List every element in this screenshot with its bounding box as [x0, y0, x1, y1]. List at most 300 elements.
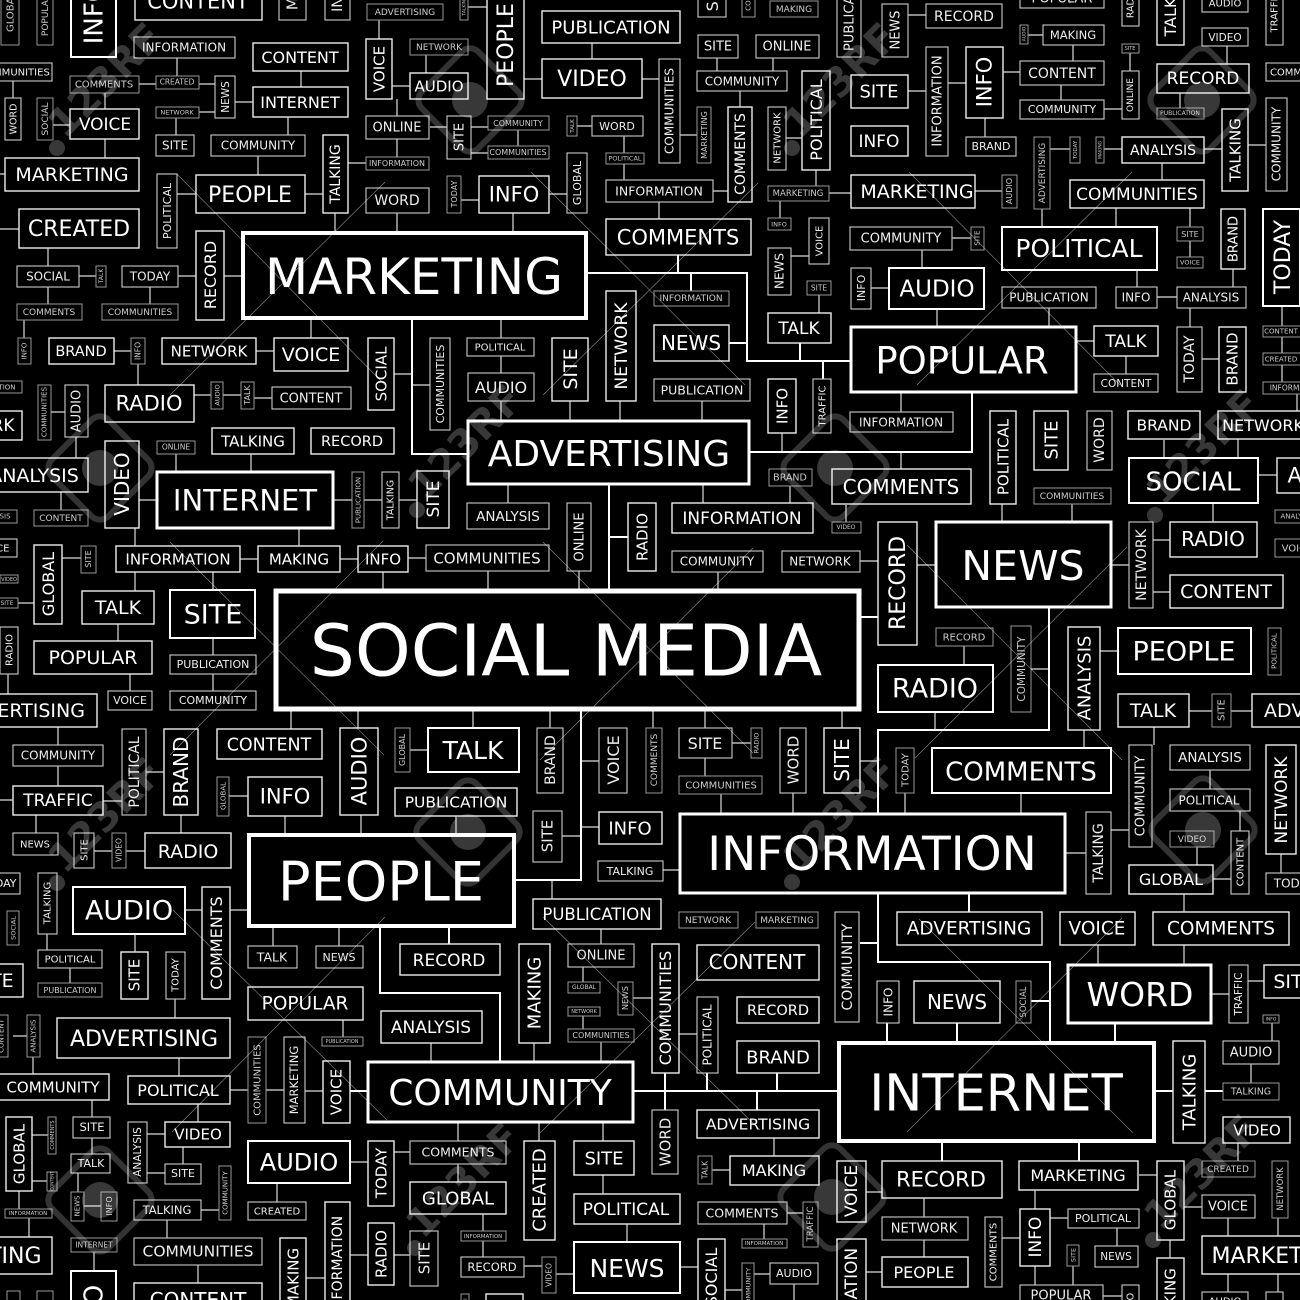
NEWS — [936, 522, 1111, 607]
VOICE: VOICE — [79, 115, 131, 135]
NETWORK: NETWORK — [416, 43, 463, 53]
TALKING: TALKING — [1230, 1086, 1271, 1097]
COMMENTS — [48, 1117, 56, 1154]
CONTENT: CONTENT — [1180, 581, 1272, 603]
INFO — [71, 1271, 116, 1300]
ANALYSIS: ANALYSIS — [1130, 143, 1196, 159]
AUDIO — [340, 728, 378, 815]
CREATED — [1202, 1161, 1255, 1177]
COMMUNITIES — [568, 1029, 634, 1042]
PUBLICATION: PUBLICATION — [661, 382, 743, 398]
INFORMATION: INFORMATION — [464, 1234, 502, 1240]
SITE — [533, 811, 562, 862]
PEOPLE: PEOPLE — [278, 850, 484, 913]
CREATED: CREATED — [1207, 1165, 1249, 1175]
PUBLICATION: PUBLICATION — [325, 1039, 359, 1045]
COMMENTS — [606, 219, 751, 255]
VIDEO — [112, 833, 126, 868]
TODAY — [0, 873, 20, 894]
SITE: SITE — [80, 1120, 104, 1134]
SOCIAL: SOCIAL — [9, 916, 17, 940]
POLITICAL — [1268, 628, 1281, 675]
MAKING — [280, 1238, 306, 1300]
PUBLICATION: PUBLICATION — [355, 477, 363, 523]
ANALYSIS: ANALYSIS — [1178, 750, 1242, 766]
ADVERTISING — [1034, 137, 1050, 209]
INFORMATION — [366, 157, 429, 170]
WORD: WORD — [656, 1118, 674, 1166]
TRAFFIC — [1266, 1292, 1283, 1300]
COMMENTS — [70, 76, 139, 93]
CONTENT — [272, 387, 351, 409]
ANALYSIS — [128, 1122, 147, 1183]
ANALYSIS — [1177, 287, 1246, 308]
INFORMATION — [926, 47, 948, 156]
INFORMATION: INFORMATION — [125, 550, 231, 568]
NEWS: NEWS — [220, 81, 232, 113]
AUDIO — [1202, 1292, 1248, 1300]
SITE — [851, 75, 908, 108]
TALKING — [382, 472, 399, 528]
INFORMATION — [325, 1202, 350, 1300]
COMMENTS: COMMENTS — [945, 757, 1097, 787]
VIDEO — [832, 522, 861, 533]
RECORD — [737, 997, 819, 1023]
SITE: SITE — [560, 348, 582, 390]
VOICE — [108, 691, 152, 710]
NETWORK — [1129, 522, 1153, 608]
MAKING — [730, 1156, 819, 1185]
SITE — [679, 728, 732, 758]
COMMENTS: COMMENTS — [1167, 919, 1275, 940]
CREATED — [248, 1202, 306, 1220]
ANALYSIS: ANALYSIS — [132, 1127, 144, 1177]
TALK: TALK — [777, 319, 821, 339]
RADIO: RADIO — [158, 841, 218, 863]
NEWS: NEWS — [1100, 1251, 1132, 1263]
MARKETING — [851, 175, 975, 208]
NETWORK — [162, 338, 256, 364]
COMMENTS: COMMENTS — [989, 1223, 1000, 1281]
RADIO — [1122, 0, 1139, 26]
POLITICAL — [157, 174, 177, 248]
POLITICAL — [574, 1194, 680, 1224]
SOCIAL: SOCIAL — [1019, 986, 1029, 1018]
SITE: SITE — [0, 600, 14, 607]
CREATED: CREATED — [160, 78, 195, 87]
ONLINE: ONLINE — [763, 40, 811, 55]
MARKETING — [0, 1237, 52, 1274]
COMMUNITY — [170, 691, 256, 710]
NETWORK — [882, 1217, 968, 1240]
NEWS — [215, 76, 235, 118]
VOICE: VOICE — [604, 735, 623, 785]
VOICE — [0, 539, 17, 557]
GLOBAL — [34, 545, 62, 624]
MARKETING: MARKETING — [1030, 1166, 1126, 1185]
TALK: TALK — [98, 268, 105, 284]
POLITICAL — [1002, 227, 1157, 270]
SITE — [1264, 965, 1300, 998]
GLOBAL — [1129, 865, 1213, 894]
ANALYSIS — [1170, 745, 1250, 770]
INTERNET — [253, 87, 348, 117]
CREATED: CREATED — [529, 1148, 550, 1232]
TODAY — [1177, 327, 1202, 392]
SOCIAL — [1129, 458, 1258, 503]
COMMUNITIES — [1034, 488, 1111, 504]
TALKING — [1222, 109, 1248, 191]
PUBLICATION: PUBLICATION — [405, 794, 507, 812]
MARKETING: MARKETING — [265, 248, 563, 306]
ADVERTISING — [57, 1018, 230, 1058]
NEWS — [914, 981, 1000, 1023]
POLITICAL — [990, 411, 1016, 504]
INFORMATION: INFORMATION — [659, 294, 723, 304]
NETWORK — [768, 107, 786, 170]
MAKING — [258, 546, 340, 572]
TALK: TALK — [94, 597, 142, 619]
VIDEO: VIDEO — [1, 577, 17, 583]
ANALYSIS: ANALYSIS — [476, 509, 540, 525]
GLOBAL — [1157, 1161, 1184, 1240]
VIDEO: VIDEO — [174, 1125, 222, 1143]
TALK — [1157, 0, 1184, 45]
BRAND — [1221, 209, 1245, 269]
CREATED: CREATED — [1265, 356, 1297, 364]
GLOBAL: GLOBAL — [1139, 870, 1203, 889]
PUBLICATION — [170, 655, 256, 674]
BRAND: BRAND — [543, 735, 559, 785]
TODAY: TODAY — [372, 1147, 390, 1199]
INFO — [248, 777, 322, 816]
SITE — [121, 952, 148, 999]
VOICE: VOICE — [370, 46, 388, 92]
TODAY: TODAY — [1182, 335, 1198, 384]
INFORMATION: INFORMATION — [931, 55, 946, 147]
POPULAR — [37, 1291, 53, 1300]
ANALYSIS — [1068, 627, 1100, 730]
RADIO — [145, 833, 231, 868]
NEWS — [71, 1192, 84, 1221]
PUBLICATION: PUBLICATION — [177, 658, 249, 671]
POLITICAL: POLITICAL — [1075, 1212, 1132, 1225]
WORD: WORD — [8, 104, 19, 134]
VIDEO — [1170, 831, 1214, 847]
VOICE — [809, 218, 829, 264]
POLITICAL: POLITICAL — [807, 79, 826, 161]
INFO — [851, 268, 871, 309]
COMMUNITY: COMMUNITY — [179, 694, 247, 707]
BRAND: BRAND — [1137, 417, 1192, 435]
PEOPLE: PEOPLE — [494, 3, 519, 87]
SITE — [1212, 694, 1231, 727]
ADVERTISING: ADVERTISING — [706, 1116, 810, 1134]
TALKING — [598, 861, 663, 881]
MAKING: MAKING — [742, 1161, 806, 1180]
SOCIAL — [1016, 981, 1031, 1023]
TALKING: TALKING — [1179, 1054, 1200, 1131]
SITE — [170, 590, 255, 638]
COMMUNITIES — [426, 545, 549, 571]
AUDIO: AUDIO — [348, 737, 372, 805]
SITE: SITE — [974, 230, 982, 246]
NEWS: NEWS — [961, 542, 1085, 590]
RECORD — [400, 944, 500, 975]
SITE: SITE — [415, 1242, 433, 1274]
RECORD — [882, 1161, 1002, 1198]
WORD — [1068, 965, 1211, 1023]
GLOBAL: GLOBAL — [572, 984, 597, 991]
SOCIAL — [698, 1239, 725, 1300]
COMMENTS — [410, 1141, 506, 1164]
COMMUNITY — [672, 551, 763, 572]
VIDEO — [542, 59, 642, 98]
COMMUNITIES: COMMUNITIES — [662, 68, 676, 154]
COMMUNITY: COMMUNITY — [221, 138, 296, 152]
watermark logos, small with 123RF: 123RF — [399, 376, 532, 509]
INFORMATION: INFORMATION — [859, 415, 943, 429]
COMMENTS: COMMENTS — [617, 226, 739, 250]
INTERNET: INTERNET — [75, 1241, 113, 1250]
RECORD: RECORD — [467, 1260, 517, 1274]
AUDIO: AUDIO — [414, 77, 464, 95]
COMMUNITY — [742, 1263, 754, 1300]
COMMUNITIES: COMMUNITIES — [253, 1044, 264, 1116]
MAKING: MAKING — [269, 550, 329, 568]
RADIO: RADIO — [372, 1230, 390, 1278]
NETWORK: NETWORK — [571, 1009, 598, 1015]
VOICE — [366, 39, 392, 99]
ANALYSIS — [1275, 510, 1300, 523]
POLITICAL: POLITICAL — [1015, 234, 1143, 263]
CONTENT — [1231, 831, 1249, 894]
ANALYSIS: ANALYSIS — [1183, 290, 1239, 304]
CONTENT: CONTENT — [1264, 328, 1299, 336]
COMMUNITY: COMMUNITY — [6, 1078, 100, 1096]
INFORMATION — [680, 814, 1065, 893]
RECORD: RECORD — [321, 434, 383, 450]
AUDIO — [770, 1263, 818, 1284]
ONLINE — [1122, 71, 1139, 119]
TALK: TALK — [77, 1157, 105, 1170]
POPULAR: POPULAR — [262, 994, 348, 1015]
NEWS — [574, 1242, 680, 1293]
ADVERTISING: ADVERTISING — [488, 434, 730, 475]
ANALYSIS — [1277, 458, 1300, 493]
COMMUNITY: COMMUNITY — [1134, 756, 1149, 836]
GLOBAL — [7, 1291, 20, 1300]
INFO — [131, 338, 145, 364]
SITE: SITE — [704, 40, 732, 55]
thick connectors — [350, 255, 1223, 1161]
TALKING — [461, 1294, 469, 1300]
MARKETING — [768, 186, 829, 201]
INFO — [1263, 1015, 1279, 1023]
VIDEO — [165, 1122, 230, 1147]
COMMENTS: COMMENTS — [75, 80, 133, 91]
GLOBAL: GLOBAL — [398, 733, 407, 766]
NETWORK: NETWORK — [1134, 528, 1150, 601]
RADIO — [1170, 522, 1257, 557]
PUBLICATION: PUBLICATION — [551, 17, 671, 38]
SITE: SITE — [811, 284, 827, 293]
INFO: INFO — [1026, 1217, 1046, 1257]
SITE — [417, 471, 449, 528]
INFO — [1116, 287, 1157, 308]
GLOBAL: GLOBAL — [220, 782, 228, 810]
INFO: INFO — [105, 1196, 114, 1216]
WORD — [1087, 411, 1112, 470]
TRAFFIC — [1229, 965, 1248, 1023]
SITE: SITE — [171, 1167, 195, 1180]
WORD: WORD — [1087, 975, 1193, 1014]
COMMUNITY: COMMUNITY — [1028, 103, 1096, 116]
ADVERTISING: ADVERTISING — [375, 8, 435, 18]
RADIO: RADIO — [752, 733, 760, 753]
POLITICAL — [606, 153, 644, 164]
POPULAR — [248, 987, 363, 1020]
COMMUNITIES — [488, 146, 549, 159]
SITE: SITE — [584, 1148, 624, 1169]
COMMUNITY — [219, 1166, 231, 1220]
AUDIO: AUDIO — [260, 1149, 338, 1177]
SITE — [1067, 1245, 1079, 1266]
INFORMATION: INFORMATION — [9, 1211, 47, 1217]
VIDEO: VIDEO — [115, 838, 124, 862]
INFO — [1020, 1209, 1050, 1266]
CREATED — [156, 76, 199, 89]
COMMUNITY — [742, 0, 755, 17]
CREATED: CREATED — [254, 1207, 301, 1218]
AUDIO: AUDIO — [776, 1267, 812, 1280]
BRAND — [1219, 327, 1246, 392]
INTERNET: INTERNET — [173, 483, 317, 517]
INTERNET — [157, 472, 333, 528]
VOICE — [837, 1161, 866, 1222]
BRAND — [769, 469, 812, 486]
POLITICAL: POLITICAL — [475, 343, 526, 354]
MAKING — [519, 944, 550, 1043]
TODAY — [1266, 873, 1300, 894]
WORD — [366, 188, 429, 213]
INFO — [101, 1192, 117, 1221]
ONLINE — [366, 116, 429, 139]
SITE: SITE — [125, 959, 143, 991]
TODAY — [122, 266, 178, 287]
PUBLICATION — [38, 983, 102, 997]
RADIO — [1122, 1285, 1139, 1300]
POLITICAL — [697, 997, 718, 1073]
PUBLICATION — [837, 1239, 866, 1300]
RECORD — [926, 4, 1002, 28]
VOICE: VOICE — [1069, 919, 1125, 940]
NEWS — [654, 325, 729, 361]
RADIO: RADIO — [5, 634, 16, 666]
COMMUNITY: COMMUNITY — [861, 232, 941, 247]
CONTENT: CONTENT — [261, 48, 339, 67]
INFORMATION — [0, 381, 22, 393]
watermark logos, small with 123RF: 123RF — [774, 748, 907, 881]
TALK — [82, 591, 154, 624]
COMMUNITIES: COMMUNITIES — [685, 781, 757, 792]
INTERNET — [839, 1043, 1154, 1141]
MAKING — [770, 1, 818, 17]
VOICE — [323, 1061, 350, 1123]
COMMUNITIES — [1070, 180, 1204, 208]
SITE — [574, 1141, 634, 1175]
watermark logos, small with 123RF: 123RF — [1137, 381, 1270, 514]
RECORD: RECORD — [934, 9, 994, 25]
TRAFFIC — [803, 1202, 818, 1247]
COMMUNITY — [1011, 626, 1031, 712]
INFORMATION: INFORMATION — [142, 40, 226, 54]
WORD: WORD — [374, 193, 420, 209]
watermark logos, small with 123RF: 123RF — [39, 749, 172, 882]
SITE — [824, 728, 860, 793]
COMMUNITIES: COMMUNITIES — [433, 549, 541, 567]
VOICE: VOICE — [1180, 258, 1200, 266]
RECORD: RECORD — [413, 951, 485, 971]
COMMENTS — [698, 1202, 787, 1224]
RECORD: RECORD — [1167, 69, 1239, 89]
ONLINE: ONLINE — [573, 513, 588, 561]
INFO: INFO — [365, 550, 401, 568]
ADVERTISING: ADVERTISING — [1038, 143, 1048, 203]
TODAY — [896, 748, 914, 793]
SOCIAL: SOCIAL — [372, 346, 390, 401]
COMMUNITIES — [38, 385, 51, 440]
SOCIAL — [37, 98, 53, 140]
RECORD — [878, 522, 917, 645]
SITE: SITE — [859, 81, 899, 102]
CONTENT — [697, 945, 819, 980]
COMMUNITIES: COMMUNITIES — [434, 345, 447, 423]
CONTENT — [1020, 61, 1104, 85]
TODAY: TODAY — [450, 180, 459, 208]
POPULAR — [1020, 1285, 1103, 1300]
AUDIO — [65, 385, 88, 437]
NETWORK: NETWORK — [789, 554, 852, 568]
COMMUNITIES — [134, 1238, 262, 1265]
POPULAR — [1020, 0, 1104, 8]
POLITICAL: POLITICAL — [45, 955, 96, 966]
TALKING: TALKING — [1226, 118, 1244, 183]
TALK — [248, 946, 297, 968]
POLITICAL — [128, 1076, 230, 1104]
INFORMATION — [116, 546, 240, 572]
TODAY: TODAY — [901, 752, 912, 788]
AUDIO — [1202, 0, 1248, 12]
POLITICAL — [122, 729, 146, 815]
RECORD — [311, 428, 394, 454]
INFO: INFO — [771, 220, 787, 228]
COMMENTS: COMMENTS — [50, 1120, 56, 1150]
RECORD: RECORD — [886, 536, 911, 630]
TALKING — [1173, 1041, 1205, 1143]
COMMENTS: COMMENTS — [650, 733, 660, 786]
CONTENT — [135, 0, 262, 20]
CONTENT — [1094, 374, 1158, 392]
TODAY: TODAY — [129, 269, 171, 283]
POLITICAL: POLITICAL — [161, 182, 174, 239]
COMMUNITY — [1020, 100, 1104, 119]
GLOBAL: GLOBAL — [422, 1188, 494, 1209]
ONLINE — [568, 944, 634, 967]
INFO: INFO — [1122, 290, 1150, 304]
PEOPLE — [249, 835, 514, 926]
RADIO: RADIO — [116, 392, 182, 416]
